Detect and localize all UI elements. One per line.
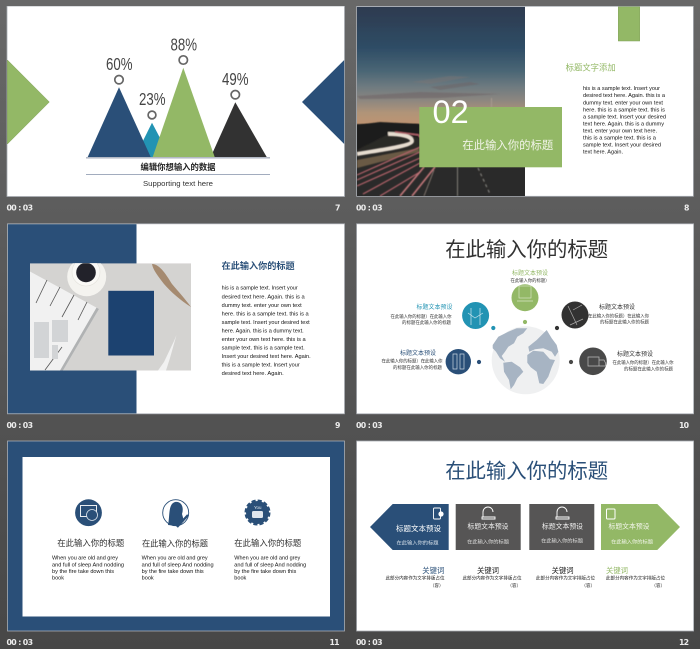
slide footers: time and page numbers: 00 : 03 <box>6 204 33 212</box>
decorative green tab <box>618 7 640 41</box>
body text: desired text here. Again. <box>222 371 284 377</box>
keyword 3: 关键词 <box>552 566 574 575</box>
photo: highway at dusk <box>357 7 525 196</box>
step 1 blue arrow: 在此输入你的标题 <box>396 540 438 546</box>
keyword 1: （容） <box>430 582 444 589</box>
column 2: and full of sleep And nodding <box>142 562 214 568</box>
panel: slide 9 photo and text <box>8 224 344 414</box>
body text: here. Again. this is a dummy text. <box>222 328 304 334</box>
column 2: by the fire take down this <box>142 569 204 575</box>
node: lower left blue: 的标题在此输入你的标题 <box>393 364 442 371</box>
node: left teal: 在此输入你的标题）在此输入你 <box>390 313 452 320</box>
supporting text: Supporting text here <box>143 179 213 188</box>
panel: slide 7 mountain chart <box>7 6 344 196</box>
heading: 标题文字添加 <box>566 62 616 72</box>
icon: green side triangle <box>7 60 49 144</box>
keyword 3: （容） <box>582 582 595 589</box>
body text: desired text here. Again. this is a <box>222 294 305 300</box>
slide footers: time and page numbers: 11 <box>330 638 340 647</box>
panel: slide 8 section cover <box>357 6 693 196</box>
step 2 gray box <box>456 504 521 550</box>
heading: 在此输入你的标题 <box>222 260 295 271</box>
keyword 3 <box>536 566 596 589</box>
step 3 gray box: 标题文本预设 <box>542 522 583 530</box>
node: right dark <box>555 302 649 330</box>
node: lower left blue <box>382 349 481 374</box>
column 1 <box>52 499 124 582</box>
slide footers: time and page numbers: 00 : 03 <box>6 421 33 430</box>
chart: mountain percentages <box>88 34 267 157</box>
step 4 green arrow: 在此输入你的标题 <box>611 538 653 546</box>
column 3: by the fire take down this <box>234 569 297 575</box>
slide footers: time and page numbers: 00 : 03 <box>356 421 382 430</box>
panel: slide 10 globe diagram <box>357 224 694 414</box>
body text: text. enter your own text here. <box>583 128 657 134</box>
keyword 2: （容） <box>508 582 521 589</box>
node: right dark: 的标题在此输入你的标题 <box>600 318 649 326</box>
body text: dummy text. enter your own text <box>222 303 302 309</box>
body text: this is a sample text. this is a <box>583 136 656 142</box>
slide footers: time and page numbers: 7 <box>335 204 340 212</box>
step 2 gray box: 标题文本预设 <box>468 522 509 530</box>
node: top green <box>510 269 550 324</box>
column 3 <box>234 501 306 582</box>
body text: sample text. this is a sample text. <box>222 346 305 352</box>
step 1 blue arrow: 标题文本预设 <box>396 523 441 533</box>
column 3: You <box>254 505 262 510</box>
chart: mountain percentages: 23% <box>139 89 166 109</box>
green title block <box>419 107 562 167</box>
photo: desk with notebook <box>30 257 191 370</box>
body text: text here. Again. <box>583 150 623 156</box>
node: left teal: 标题文本预设 <box>416 303 452 311</box>
slide footers: time and page numbers: 00 : 03 <box>6 638 33 647</box>
keyword 2: 此部分内容作为文字排版占位 <box>462 574 522 582</box>
chart: mountain percentages: 88% <box>170 34 197 54</box>
step 4 green arrow <box>601 504 680 550</box>
node: lower right gray: 的标题在此输入你的标题 <box>624 366 673 372</box>
slide footers: time and page numbers: 12 <box>679 638 689 647</box>
panel: slide 11 three columns <box>8 441 344 631</box>
keyword 1 <box>386 566 445 589</box>
keyword 1: 此部分内容作为文字排版占位 <box>386 574 445 582</box>
column 1: 在此输入你的标题 <box>57 538 124 548</box>
keyword 4 <box>606 566 666 589</box>
step 3 gray box: 在此输入你的标题 <box>541 538 583 544</box>
blue left block <box>8 224 137 413</box>
step 3 gray box <box>529 504 594 550</box>
keyword 4: 此部分内容作为文字排版占位 <box>606 574 666 582</box>
node: lower left blue: 标题文本预设 <box>400 349 436 357</box>
column 2: 在此输入你的标题 <box>142 538 208 548</box>
step 2 gray box: 在此输入你的标题 <box>467 538 509 546</box>
column 1: book <box>52 576 64 582</box>
column 3: book <box>234 576 247 582</box>
panel: slide 12 four step process <box>357 441 694 631</box>
body text: his is a sample text. Insert your <box>222 286 298 292</box>
step 1 blue arrow <box>370 504 449 550</box>
keyword 4: （容） <box>652 582 665 589</box>
column 3: and full of sleep And nodding <box>234 562 306 568</box>
slide footers: time and page numbers: 9 <box>335 421 340 430</box>
chart: mountain percentages: 60% <box>106 54 132 74</box>
keyword 1: 关键词 <box>422 566 444 575</box>
chart: mountain percentages: 49% <box>222 69 248 89</box>
keyword 2: 关键词 <box>477 566 499 575</box>
body text: a sample text. Insert your desired <box>583 114 666 120</box>
body text: his is a sample text. Insert your <box>583 86 660 92</box>
node: top green: 在此输入你的标题） <box>510 277 550 284</box>
body text: desired text here. Again. this is a <box>583 93 665 99</box>
body text: text here. Again. this is a dummy <box>583 122 664 128</box>
node: lower right gray: 在此输入你的标题）在此输入你 <box>612 359 674 366</box>
title: 在此输入你的标题 <box>445 238 608 262</box>
title: 在此输入你的标题 <box>445 460 608 483</box>
column 2: When you are old and grey <box>142 555 208 561</box>
keyword 2 <box>462 566 522 589</box>
body text: sample text. Insert your desired text <box>222 320 310 326</box>
column 3: When you are old and grey <box>234 555 301 561</box>
body text: this is a sample text. Insert your <box>222 363 300 369</box>
keyword 3: 此部分内容作为文字排版占位 <box>536 574 596 582</box>
slide footers: time and page numbers: 8 <box>684 204 689 212</box>
body text: here. this is a sample text. this is <box>583 108 665 114</box>
column 2: book <box>142 576 154 582</box>
body text <box>222 286 311 377</box>
node: top green: 标题文本预设 <box>512 269 548 277</box>
body text: sample text. Insert your desired <box>583 142 661 148</box>
node: lower right gray: 标题文本预设 <box>617 350 653 358</box>
body text: Insert your desired text here. Again. <box>222 354 311 360</box>
section title: 在此输入你的标题 <box>462 138 553 152</box>
node: left teal <box>390 302 495 330</box>
icon: blue side triangle <box>302 60 344 144</box>
white inner card <box>22 457 330 616</box>
slide footers: time and page numbers <box>6 204 690 647</box>
node: left teal: 的标题在此输入你的标题 <box>402 319 451 326</box>
body text: dummy text. enter your own text <box>583 100 664 106</box>
column 1: and full of sleep And nodding <box>52 562 124 568</box>
chart title: 编辑你想输入的数据 <box>140 162 216 172</box>
node: lower left blue: 在此输入你的标题）在此输入你 <box>382 358 443 364</box>
node: lower right gray <box>569 348 674 375</box>
globe <box>492 326 560 394</box>
keyword 4: 关键词 <box>606 566 628 575</box>
column 1: When you are old and grey <box>52 555 118 561</box>
step 4 green arrow: 标题文本预设 <box>608 522 650 530</box>
slide footers: time and page numbers: 00 : 03 <box>356 204 382 212</box>
slide footers: time and page numbers: 00 : 03 <box>356 638 382 647</box>
slide footers: time and page numbers: 10 <box>679 421 690 430</box>
body text <box>583 86 666 156</box>
column 3: 在此输入你的标题 <box>234 538 301 548</box>
node: right dark: 标题文本预设 <box>599 303 635 311</box>
node: right dark: 在此输入你的标题）在此输入你 <box>588 312 649 320</box>
column 1: by the fire take down this <box>52 569 114 575</box>
body text: enter your own text here. this is a <box>222 337 306 343</box>
column 2 <box>142 500 214 582</box>
section number: 02 <box>432 94 469 130</box>
body text: here. this is a sample text. this is a <box>222 312 309 318</box>
